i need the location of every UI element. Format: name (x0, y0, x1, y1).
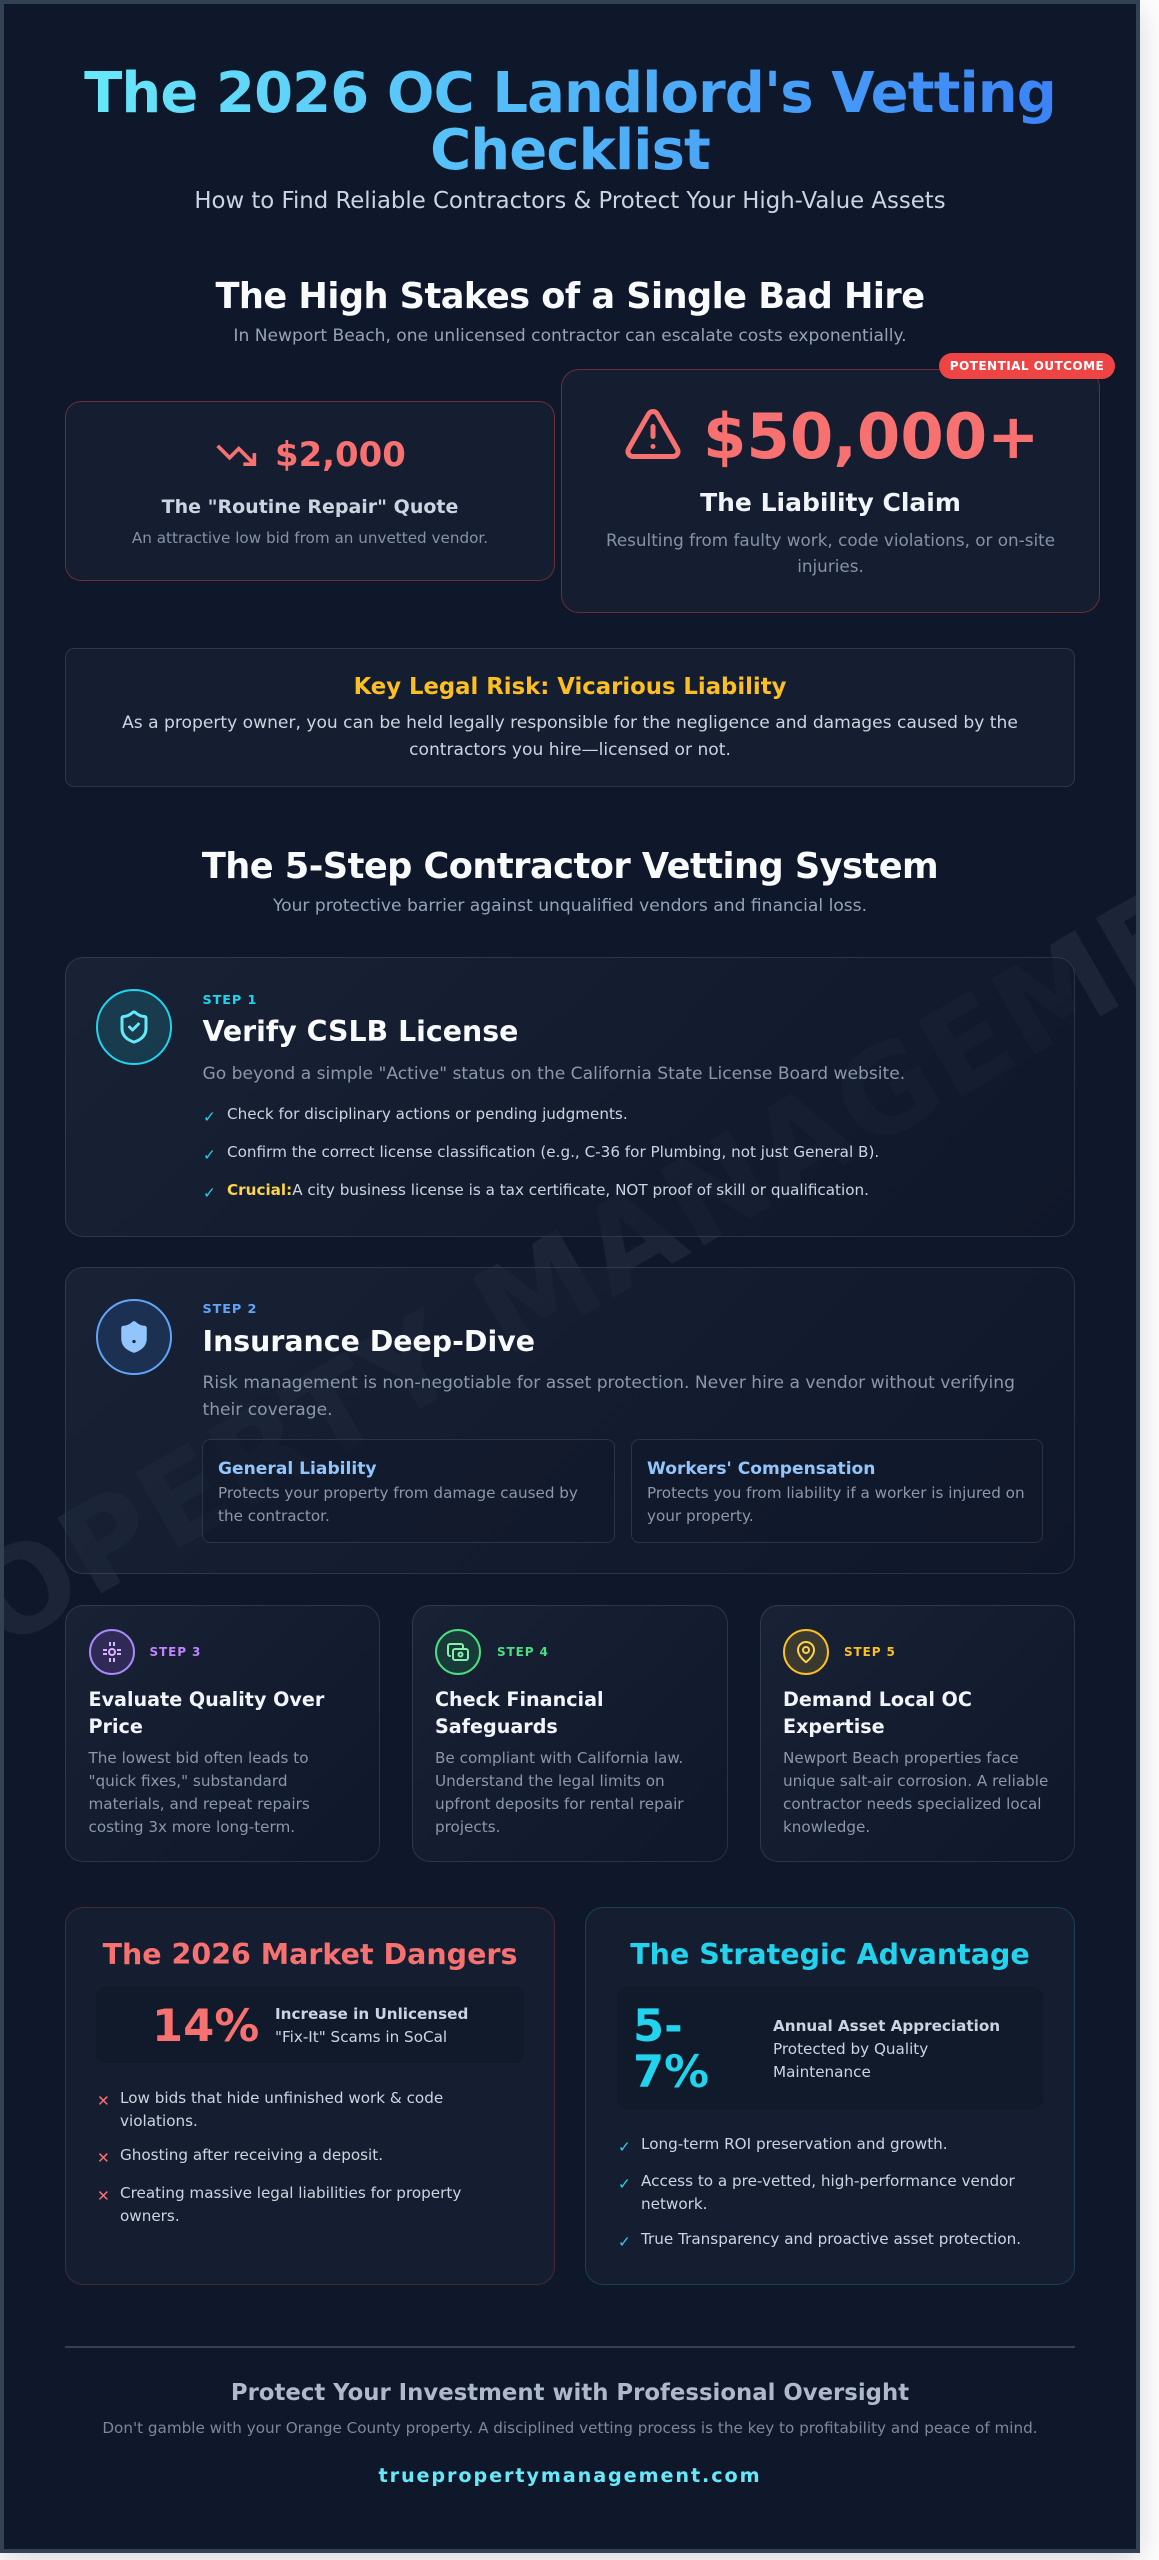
stat label: Protected by Quality (773, 2040, 928, 2058)
check item 2: ✓ (203, 1146, 216, 1164)
step label: STEP 2 (202, 1302, 257, 1317)
panel: liability claim (561, 369, 1100, 613)
coverage title: Workers' Compensation (647, 1459, 875, 1479)
advantage item 2: ✓ (618, 2174, 631, 2192)
step label: STEP 5 (844, 1645, 896, 1659)
step description (783, 1749, 1048, 1836)
icon: map pin (783, 1629, 829, 1675)
danger list (97, 2088, 461, 2224)
step title (88, 1688, 324, 1738)
stat box: 14% (96, 1987, 524, 2063)
advantage list (618, 2134, 1021, 2250)
panel: step 3 (65, 1605, 380, 1862)
coverage text (218, 1484, 578, 1525)
icon: banknotes (435, 1629, 481, 1675)
step title: Demand Local OC (783, 1688, 972, 1711)
stat number (633, 1999, 709, 2098)
coverage text (647, 1484, 1025, 1525)
footer heading: Protect Your Investment with Professional Oversight (231, 2380, 909, 2406)
danger item 3: owners. (120, 2206, 180, 2224)
advantage item 2 (618, 2172, 1015, 2212)
panel: step 2 (65, 1267, 1075, 1574)
claim description: injuries. (797, 556, 864, 576)
panel heading: The Strategic Advantage (630, 1938, 1030, 1971)
badge: potential outcome: POTENTIAL OUTCOME (950, 359, 1104, 373)
stat box: 5-7% (617, 1987, 1043, 2109)
step description: contractor needs specialized local (783, 1795, 1042, 1813)
step title: Verify CSLB License (202, 1015, 518, 1048)
step description: Risk management is non-negotiable for asset protection. Never hire a vendor without verifying (202, 1373, 1015, 1393)
coverage title: General Liability (218, 1459, 377, 1479)
icon: shield check (96, 989, 172, 1065)
step description: The lowest bid often leads to (88, 1749, 308, 1767)
price: $2,000: $2,000 (275, 435, 406, 474)
panel: market dangers (65, 1907, 555, 2285)
claim description (606, 530, 1055, 576)
callout heading: Key Legal Risk: Vicarious Liability (354, 674, 786, 700)
title: The 2026 OC Landlord's Vetting (84, 61, 1056, 126)
danger item 1: ✕ (97, 2092, 110, 2110)
panel: strategic advantage (585, 1907, 1075, 2285)
step title: Safeguards (435, 1715, 558, 1738)
subtitle: How to Find Reliable Contractors & Protect Your High-Value Assets (194, 188, 946, 214)
icon: shield filled (96, 1299, 172, 1375)
price: $50,000+: $50,000+ (703, 400, 1039, 473)
step description: Newport Beach properties face (783, 1749, 1019, 1767)
callout text: contractors you hire—licensed or not. (409, 740, 731, 760)
step description (202, 1373, 1015, 1420)
danger item 1 (97, 2088, 443, 2130)
step label: STEP 3 (150, 1645, 201, 1659)
subheading: 5-step system: Your protective barrier against unqualified vendors and financial loss. (273, 896, 867, 916)
step label: STEP 4 (497, 1645, 549, 1659)
title: Checklist (430, 118, 710, 183)
stat label (773, 2016, 1000, 2080)
step description: knowledge. (783, 1818, 870, 1836)
claim label: The Liability Claim (700, 488, 961, 517)
danger item 3 (97, 2184, 461, 2224)
step title (435, 1688, 604, 1738)
stat number: 5- (633, 1999, 683, 2052)
title (0, 65, 1140, 179)
step description: projects. (435, 1818, 500, 1836)
danger item 1: violations. (120, 2112, 198, 2130)
step title: Price (88, 1715, 143, 1738)
check item 2: Confirm the correct license classification (e.g., C-36 for Plumbing, not just General B). (227, 1142, 879, 1160)
heading: 5-step system: The 5-Step Contractor Vetting System (202, 846, 938, 887)
sub-panel: general liability (202, 1439, 615, 1543)
coverage text: the contractor. (218, 1507, 330, 1525)
step title (783, 1688, 972, 1738)
icon: trending down (216, 444, 256, 466)
advantage item 1: Long-term ROI preservation and growth. (641, 2134, 948, 2152)
step description: "quick fixes," substandard (88, 1772, 287, 1790)
step title: Insurance Deep-Dive (202, 1325, 535, 1358)
step description: unique salt-air corrosion. A reliable (783, 1772, 1048, 1790)
panel: step 4 (412, 1605, 728, 1862)
heading: high stakes: The High Stakes of a Single Bad Hire (215, 276, 925, 317)
step description: Go beyond a simple "Active" status on the California State License Board website. (202, 1064, 905, 1084)
step title: Expertise (783, 1715, 885, 1738)
checklist (203, 1104, 879, 1202)
panel heading: The 2026 Market Dangers (103, 1938, 517, 1971)
advantage item 1: ✓ (618, 2138, 631, 2156)
advantage item 3: True Transparency and proactive asset protection. (641, 2230, 1021, 2248)
panel: vicarious liability callout (65, 648, 1075, 787)
step description (88, 1749, 310, 1836)
coverage text: Protects your property from damage caused by (218, 1484, 578, 1502)
step title: Evaluate Quality Over (88, 1688, 324, 1711)
stat label: Annual Asset Appreciation (773, 2016, 1000, 2034)
footer text: Don't gamble with your Orange County property. A disciplined vetting process is the key to profitability and peace of mind. (102, 2419, 1038, 2437)
icon: warning triangle (625, 409, 681, 459)
step description (435, 1749, 684, 1836)
sub-panel: workers' compensation (631, 1439, 1043, 1543)
panel: step 1 (65, 957, 1075, 1237)
check item 1: Check for disciplinary actions or pending judgments. (227, 1104, 628, 1122)
check item 1: ✓ (203, 1108, 216, 1126)
stat label: Increase in Unlicensed (275, 2004, 468, 2022)
stat number: 14% (152, 1999, 259, 2052)
danger item 1: Low bids that hide unfinished work & code (120, 2088, 443, 2106)
step label: STEP 1 (202, 993, 257, 1008)
panel: routine repair quote (65, 401, 555, 581)
step description: materials, and repeat repairs (88, 1795, 310, 1813)
danger item 3: Creating massive legal liabilities for property (120, 2184, 461, 2202)
stat number: 7% (633, 2045, 709, 2098)
step description: Understand the legal limits on (435, 1772, 665, 1790)
danger item 2: Ghosting after receiving a deposit. (120, 2146, 383, 2164)
stat label: "Fix-It" Scams in SoCal (275, 2028, 447, 2046)
advantage item 3: ✓ (618, 2232, 631, 2250)
advantage item 2: network. (641, 2194, 708, 2212)
quote description: An attractive low bid from an unvetted vendor. (132, 529, 488, 547)
icon: quality gauge (88, 1629, 134, 1675)
step description: their coverage. (202, 1400, 333, 1420)
callout text (122, 713, 1018, 760)
coverage text: Protects you from liability if a worker is injured on (647, 1484, 1025, 1502)
danger item 3: ✕ (97, 2186, 110, 2204)
badge: potential outcome (939, 353, 1115, 379)
stat label: Maintenance (773, 2062, 871, 2080)
callout text: As a property owner, you can be held legally responsible for the negligence and damages caused by the (122, 713, 1018, 733)
subheading: high stakes: In Newport Beach, one unlicensed contractor can escalate costs exponentially. (233, 326, 907, 346)
step title: Check Financial (435, 1688, 604, 1711)
stat label (275, 2004, 468, 2046)
danger item 2: ✕ (97, 2148, 110, 2166)
step description: costing 3x more long-term. (88, 1818, 295, 1836)
quote label: The "Routine Repair" Quote (162, 496, 458, 518)
check item 3: Crucial:A city business license is a tax certificate, NOT proof of skill or qualification. (227, 1180, 869, 1198)
footer link: truepropertymanagement.com (379, 2464, 761, 2487)
check item 3: ✓ (203, 1184, 216, 1202)
panel: step 5 (760, 1605, 1075, 1862)
claim description: Resulting from faulty work, code violations, or on-site (606, 530, 1055, 550)
advantage item 2: Access to a pre-vetted, high-performance vendor (641, 2172, 1015, 2190)
coverage text: your property. (647, 1507, 754, 1525)
step description: upfront deposits for rental repair (435, 1795, 684, 1813)
step description: Be compliant with California law. (435, 1749, 683, 1767)
